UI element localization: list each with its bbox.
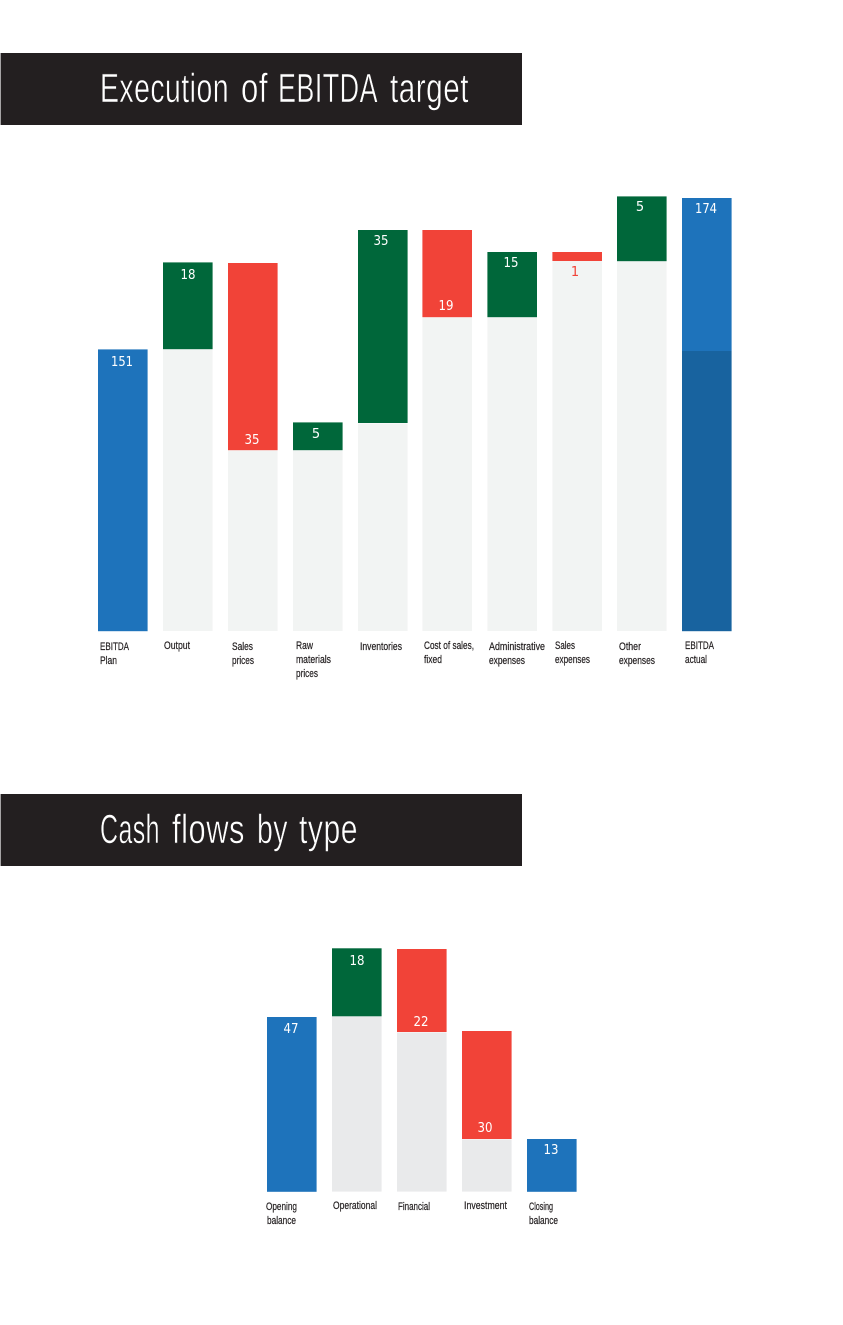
- bar: Administrative expenses: [487, 252, 537, 631]
- axis labels: EBITDA: actual: [685, 654, 707, 666]
- bar: Other expenses: [617, 196, 667, 631]
- heading: Cash flows by type: type: [299, 806, 358, 852]
- axis labels: EBITDA: EBITDA: [685, 640, 714, 652]
- bar: EBITDA actual: [682, 198, 732, 631]
- bar: Raw materials prices: [293, 422, 343, 631]
- axis labels: EBITDA: [100, 640, 714, 680]
- axis labels: cash flows: balance: [529, 1215, 558, 1227]
- bar: Operational: 18: [350, 954, 364, 969]
- bar: Output: [163, 262, 213, 631]
- axis labels: cash flows: Investment: [464, 1200, 507, 1212]
- axis labels: cash flows: [266, 1200, 558, 1227]
- axis labels: EBITDA: Inventories: [360, 641, 402, 653]
- axis labels: EBITDA: prices: [296, 668, 318, 680]
- heading: Execution of EBITDA target: target: [390, 65, 469, 111]
- axis labels: EBITDA: Sales: [555, 640, 575, 652]
- axis labels: EBITDA: fixed: [424, 654, 442, 666]
- axis labels: cash flows: Operational: [333, 1200, 377, 1212]
- bar: Financial: [397, 949, 447, 1192]
- bar: Operational: [332, 948, 382, 1192]
- bar: Opening balance: [267, 1017, 317, 1192]
- axis labels: EBITDA: Output: [164, 640, 190, 652]
- bar: Inventories: [358, 230, 408, 631]
- heading: Execution of EBITDA target: [1, 53, 522, 125]
- heading: Execution of EBITDA target: Execution: [100, 65, 229, 111]
- heading: Execution of EBITDA target: EBITDA: [278, 65, 378, 111]
- bar: Investment: 30: [478, 1121, 492, 1136]
- bar: Other expenses: 5: [636, 200, 644, 215]
- bar: EBITDA Plan: 151: [111, 355, 133, 370]
- axis labels: cash flows: Financial: [398, 1201, 430, 1213]
- bar: EBITDA actual: 174: [695, 202, 717, 217]
- bar: Sales prices: [228, 263, 278, 631]
- axis labels: EBITDA: materials: [296, 654, 331, 666]
- axis labels: EBITDA: Cost of sales,: [424, 640, 474, 652]
- axis labels: EBITDA: EBITDA: [100, 641, 129, 653]
- axis labels: EBITDA: expenses: [619, 655, 655, 667]
- waterfall chart: EBITDA: [98, 196, 732, 631]
- axis labels: EBITDA: Raw: [296, 640, 313, 652]
- axis labels: cash flows: balance: [267, 1215, 296, 1227]
- bar: Investment: [462, 1031, 512, 1192]
- heading: Cash flows by type: flows: [172, 806, 245, 852]
- bar: Opening balance: 47: [284, 1022, 298, 1037]
- waterfall chart: cash flows: [267, 948, 577, 1192]
- bar: Cost of sales, fixed: [422, 230, 472, 631]
- heading: Cash flows by type: [1, 794, 522, 866]
- axis labels: cash flows: Opening: [266, 1201, 297, 1213]
- bar: Closing balance: 13: [544, 1143, 558, 1158]
- axis labels: cash flows: Closing: [529, 1201, 553, 1213]
- bar: Administrative expenses: 15: [504, 256, 518, 271]
- bar: Closing balance: [527, 1139, 577, 1192]
- axis labels: EBITDA: Other: [619, 641, 641, 653]
- bar: Financial: 22: [414, 1015, 428, 1030]
- bar: Cost of sales, fixed: 19: [438, 299, 454, 314]
- bar: Sales expenses: [552, 252, 602, 631]
- bar: Inventories: 35: [374, 234, 388, 249]
- axis labels: EBITDA: Sales: [232, 641, 253, 653]
- axis labels: EBITDA: Administrative: [489, 641, 545, 653]
- axis labels: EBITDA: expenses: [555, 654, 590, 666]
- heading: Execution of EBITDA target: of: [241, 65, 268, 111]
- bar: Output: 18: [180, 268, 196, 283]
- axis labels: EBITDA: Plan: [100, 655, 117, 667]
- bar: EBITDA Plan: [98, 349, 148, 631]
- axis labels: EBITDA: expenses: [489, 655, 525, 667]
- heading: Cash flows by type: Cash: [100, 806, 160, 852]
- heading: Cash flows by type: by: [257, 806, 288, 852]
- bar: Sales prices: 35: [244, 433, 260, 448]
- bar: Sales expenses: 1: [571, 265, 579, 280]
- axis labels: EBITDA: prices: [232, 655, 254, 667]
- bar: Raw materials prices: 5: [312, 427, 320, 442]
